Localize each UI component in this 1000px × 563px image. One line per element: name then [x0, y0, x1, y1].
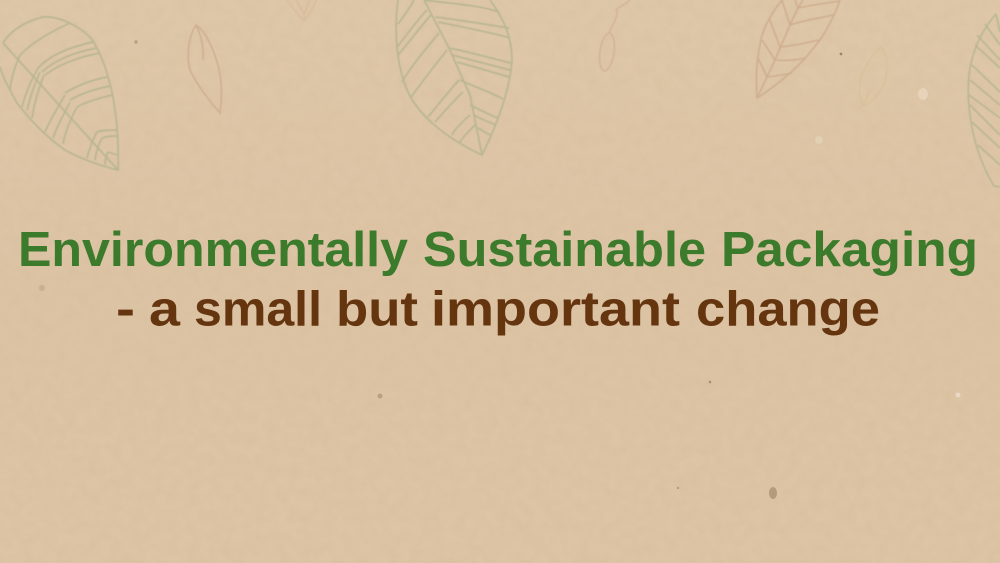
title [18, 223, 978, 336]
title line 2: but [336, 282, 418, 336]
title line 2 [116, 282, 880, 336]
leaf: small outline brown [188, 25, 221, 113]
title line 2: change [696, 282, 880, 336]
leaf: large green centre [396, 0, 512, 155]
title line 2: - [116, 282, 135, 336]
title line 2: important [431, 282, 680, 336]
paper speckles [39, 40, 960, 499]
leaf: faint yellow outline [860, 47, 887, 106]
title line 1: Sustainable [423, 223, 706, 277]
title line 1 [18, 223, 978, 277]
leaf: large green left [0, 17, 118, 170]
title line 1: Environmentally [18, 223, 408, 277]
leaf: tan upper right [756, 0, 840, 98]
title line 2: small [194, 282, 322, 336]
icon: sprout tendril [597, 0, 630, 72]
leaf: small top fragment [287, 0, 316, 21]
title line 2: a [149, 282, 181, 336]
leaf: green right edge [968, 14, 1000, 187]
title line 1: Packaging [721, 223, 978, 277]
